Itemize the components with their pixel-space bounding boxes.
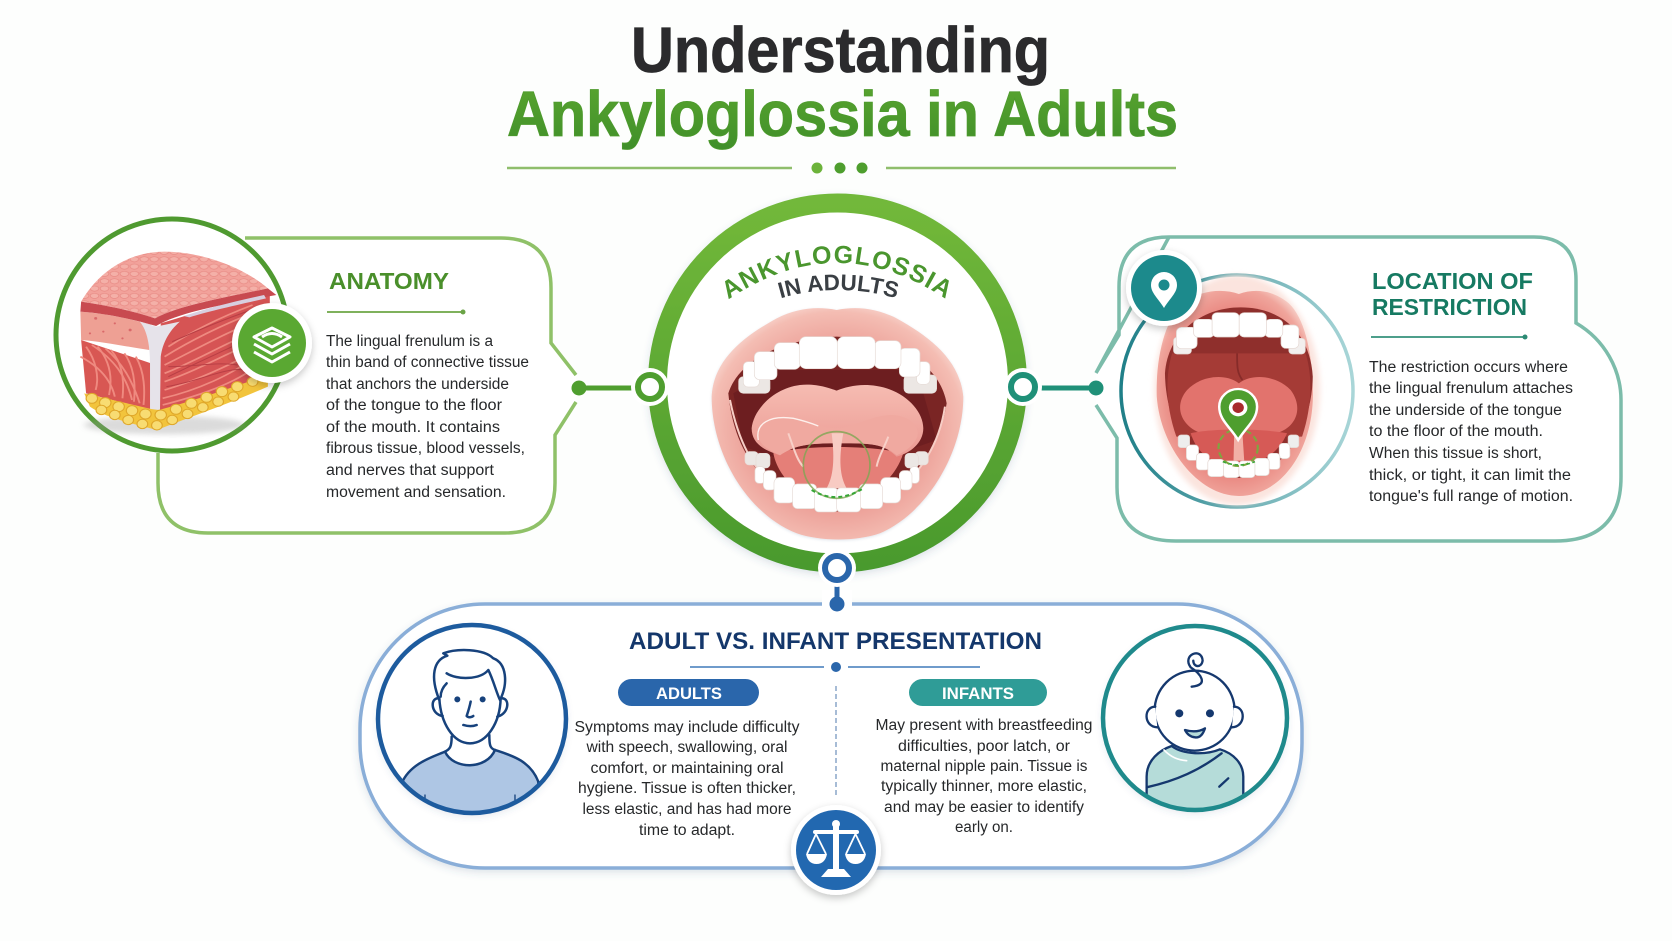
anatomy body text: of the tongue to the floor <box>326 397 502 414</box>
location body text: When this tissue is short, <box>1369 445 1542 462</box>
lower teeth <box>745 452 928 512</box>
panel: location of restriction <box>1096 237 1621 541</box>
anatomy body text: and nerves that support <box>326 462 495 479</box>
location body text: tongue's full range of motion. <box>1369 488 1573 505</box>
infants body text: difficulties, poor latch, or <box>898 738 1070 755</box>
anatomy body text <box>326 333 529 501</box>
infants body text: and may be easier to identify <box>884 799 1084 816</box>
adults body text: time to adapt. <box>639 822 735 839</box>
badge: infants <box>909 679 1047 706</box>
circular label: IN ADULTS <box>778 274 898 298</box>
infants body text: typically thinner, more elastic, <box>881 778 1087 795</box>
infants body text: early on. <box>955 819 1013 836</box>
location heading: RESTRICTION <box>1372 294 1527 320</box>
anatomy body text: fibrous tissue, blood vessels, <box>326 440 525 457</box>
badge: adults <box>618 679 759 706</box>
infants body text: May present with breastfeeding <box>876 717 1092 734</box>
connector: anatomy to center <box>572 380 640 396</box>
anatomy rule <box>327 310 466 314</box>
illustration: open mouth with pin <box>1154 275 1320 505</box>
center dashed divider <box>835 686 837 798</box>
infant portrait <box>1103 626 1287 817</box>
anatomy body text: that anchors the underside <box>326 376 509 393</box>
badge: infants: INFANTS <box>942 684 1014 703</box>
adult portrait <box>378 625 566 820</box>
icon: balance scale badge <box>791 805 881 895</box>
anatomy heading: ANATOMY <box>329 268 449 294</box>
restriction marker <box>803 432 870 498</box>
location body text: thick, or tight, it can limit the <box>1369 467 1571 484</box>
location heading: LOCATION OF <box>1372 268 1533 294</box>
adults body text: comfort, or maintaining oral <box>590 760 784 777</box>
floor of mouth <box>773 447 903 488</box>
adults body text: Symptoms may include difficulty <box>574 719 800 736</box>
panel: adult vs infant presentation <box>360 604 1302 895</box>
location body text: The restriction occurs where <box>1369 359 1568 376</box>
location rule <box>1371 334 1528 340</box>
anatomy body text: thin band of connective tissue <box>326 354 529 371</box>
adults body text: with speech, swallowing, oral <box>585 739 788 756</box>
upper teeth <box>739 337 937 393</box>
anatomy body text: The lingual frenulum is a <box>326 333 493 350</box>
adults body text: hygiene. Tissue is often thicker, <box>578 780 796 797</box>
panel: anatomy <box>56 219 576 533</box>
anatomy image circle <box>56 219 288 451</box>
location body text: the underside of the tongue <box>1369 402 1562 419</box>
title divider <box>507 162 1176 174</box>
location heading <box>1372 268 1533 320</box>
connector: center to presentation panel <box>822 580 852 612</box>
infants body text <box>876 717 1092 836</box>
node: bottom <box>818 549 856 587</box>
icon: layers badge <box>232 303 312 383</box>
title <box>507 14 1178 150</box>
tongue <box>752 385 923 457</box>
title: Understanding <box>631 14 1050 86</box>
location body text: to the floor of the mouth. <box>1369 423 1543 440</box>
center circle <box>631 194 1042 587</box>
presentation heading: ADULT VS. INFANT PRESENTATION <box>629 628 1042 655</box>
anatomy body text: movement and sensation. <box>326 484 506 501</box>
illustration: open mouth with tongue <box>712 308 963 540</box>
node: left <box>631 368 669 406</box>
icon: location pin badge <box>1126 250 1202 326</box>
node: right <box>1004 368 1042 406</box>
location image circle <box>1121 275 1353 507</box>
adults body text: less elastic, and has had more <box>582 801 792 818</box>
presentation rule <box>690 662 980 672</box>
location body text <box>1369 359 1573 505</box>
badge: adults: ADULTS <box>656 684 722 703</box>
location body text: the lingual frenulum attaches <box>1369 380 1573 397</box>
infants body text: maternal nipple pain. Tissue is <box>880 758 1088 775</box>
illustration: tissue cross-section <box>80 252 276 434</box>
circular label: ANKYLOGLOSSIA <box>725 246 949 300</box>
title: Ankyloglossia in Adults <box>507 78 1178 150</box>
anatomy body text: of the mouth. It contains <box>326 419 500 436</box>
adults body text <box>574 719 800 839</box>
connector: center to location <box>1035 380 1104 396</box>
